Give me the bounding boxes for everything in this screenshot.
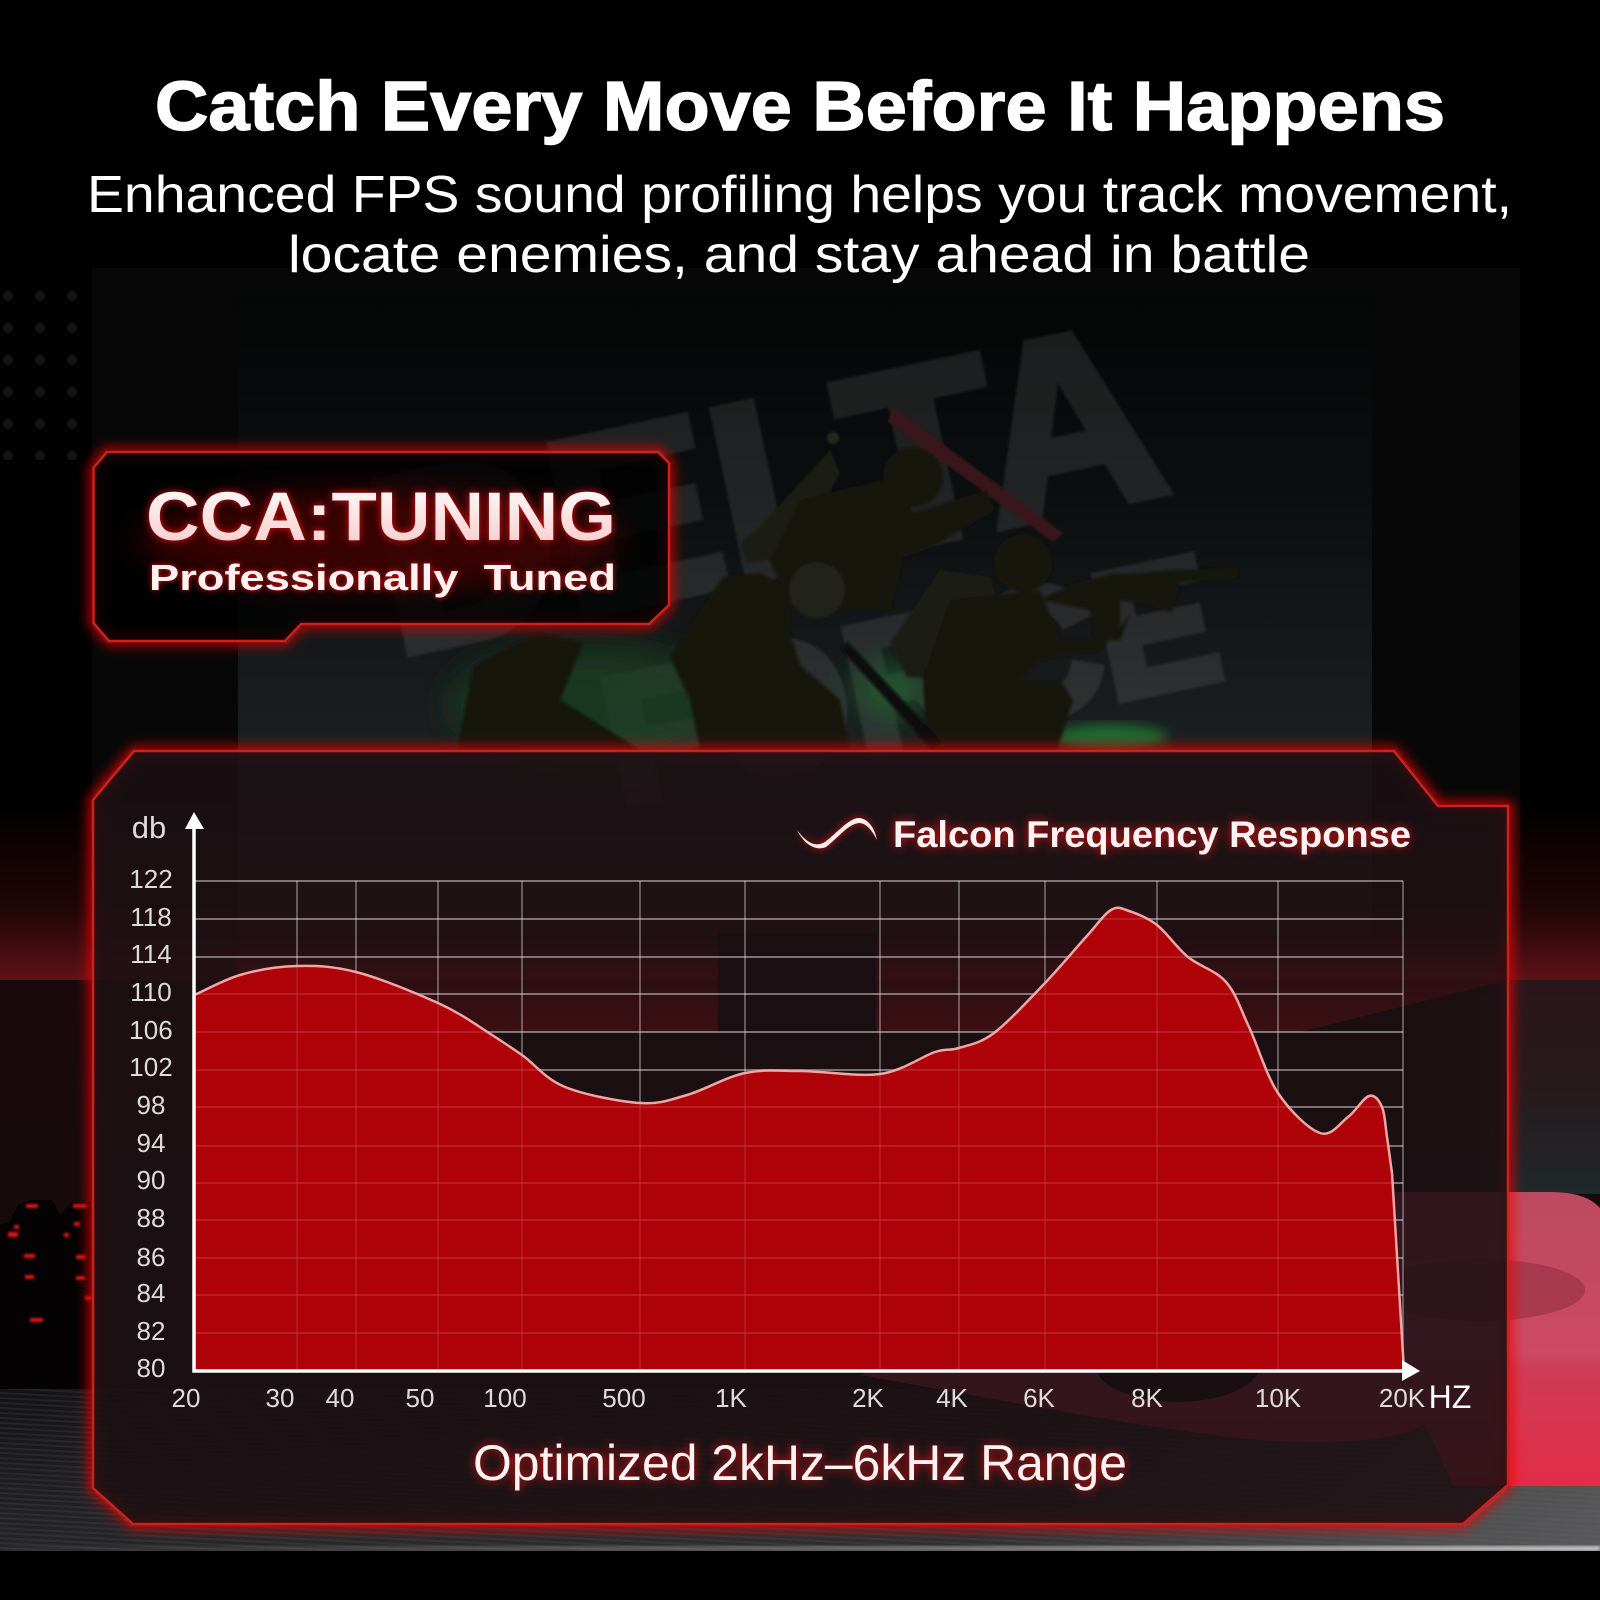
- x axis labels: 8K: [1131, 1383, 1164, 1413]
- kneeling rifleman: [890, 534, 1238, 750]
- y axis labels: 110: [130, 977, 172, 1007]
- arrow: y axis: [185, 812, 204, 829]
- right wall tone: [1480, 980, 1600, 1194]
- desk front edge: [0, 1546, 1600, 1551]
- arrow: x axis: [1402, 1360, 1420, 1381]
- desk knob: [1096, 1371, 1259, 1402]
- y axis labels: db: [132, 810, 166, 845]
- x axis labels: HZ: [1429, 1379, 1471, 1415]
- soldiers illustration: [457, 407, 1238, 750]
- desk surface: [0, 1389, 1600, 1552]
- desk right highlight: [0, 1389, 1600, 1552]
- x axis labels: 50: [406, 1383, 434, 1413]
- grid lines over fill: [194, 881, 1403, 1371]
- x axis labels: 20K: [1379, 1383, 1426, 1413]
- reflected red glow in panel: [236, 930, 1508, 1060]
- x axis labels: 4K: [936, 1383, 969, 1413]
- subtitle: locate enemies, and stay ahead in battle: [288, 226, 1310, 284]
- panel: CCA tuning badge: [94, 452, 669, 641]
- monitor frame: [92, 268, 1520, 968]
- y axis labels: 114: [130, 939, 172, 969]
- keyboard: [0, 1200, 96, 1389]
- curve outline: [194, 908, 1404, 1371]
- y axis labels: 102: [129, 1052, 173, 1082]
- y axis labels: 118: [130, 902, 172, 932]
- x axis labels: [172, 1379, 1471, 1415]
- y axis labels: 86: [137, 1242, 165, 1272]
- subtitle: [87, 166, 1512, 284]
- y axis labels: 94: [137, 1128, 165, 1158]
- legend: Falcon Frequency Response: Falcon Frequency Response: [893, 814, 1411, 855]
- y axis labels: 98: [137, 1090, 165, 1120]
- x axis labels: 100: [483, 1383, 527, 1413]
- x axis labels: 1K: [715, 1383, 748, 1413]
- x axis labels: 30: [266, 1383, 294, 1413]
- mat shading ellipse: [1375, 1259, 1585, 1321]
- speaker dots left: [0, 290, 92, 460]
- subtitle: Enhanced FPS sound profiling helps you track movement,: [87, 166, 1512, 224]
- x axis labels: 10K: [1255, 1383, 1302, 1413]
- game art title letters: DELTA: [348, 269, 1184, 707]
- x axis labels: 500: [602, 1383, 646, 1413]
- game art title letters: FORCE: [586, 518, 1235, 843]
- icon: wave legend: [797, 818, 877, 848]
- y axis labels: 82: [137, 1316, 165, 1346]
- dark stand: [718, 933, 876, 1060]
- panel: frequency response chart: [93, 751, 1508, 1524]
- left soldier: [457, 633, 640, 750]
- title: Catch Every Move Before It Happens: [155, 67, 1445, 145]
- shield: [888, 407, 1063, 542]
- subheading: Professionally Tuned: Professionally Tuned: [149, 557, 616, 598]
- y axis labels: 90: [137, 1165, 165, 1195]
- axes: [185, 812, 1420, 1381]
- monitor screen: [238, 296, 1372, 936]
- x axis labels: 6K: [1023, 1383, 1056, 1413]
- grid lines: [194, 881, 1403, 1371]
- heading: CCA:TUNING: CCA:TUNING: [146, 478, 616, 555]
- red horizon glow: [0, 800, 1600, 980]
- red mouse mat: [860, 1192, 1600, 1486]
- x axis labels: 40: [326, 1383, 354, 1413]
- response curve area: [194, 908, 1404, 1371]
- y axis labels: 80: [137, 1353, 165, 1383]
- y axis labels: 84: [137, 1278, 165, 1308]
- bottom black band: [0, 1551, 1600, 1600]
- y axis labels: [129, 810, 173, 1383]
- y axis labels: 122: [129, 864, 173, 894]
- rifle barrel dot: [827, 432, 839, 444]
- x axis labels: 20: [172, 1383, 200, 1413]
- carbon desk texture: [0, 1389, 1600, 1552]
- y axis labels: 88: [137, 1203, 165, 1233]
- center soldier: [670, 562, 942, 750]
- x axis labels: 2K: [852, 1383, 885, 1413]
- green smoke: [450, 645, 1168, 765]
- desk wall: [0, 980, 1600, 1390]
- y axis labels: 106: [129, 1015, 173, 1045]
- caption: optimized range: Optimized 2kHz–6kHz Range: [473, 1435, 1127, 1491]
- soldier with shield: [740, 447, 995, 610]
- badge text glow: [140, 490, 620, 590]
